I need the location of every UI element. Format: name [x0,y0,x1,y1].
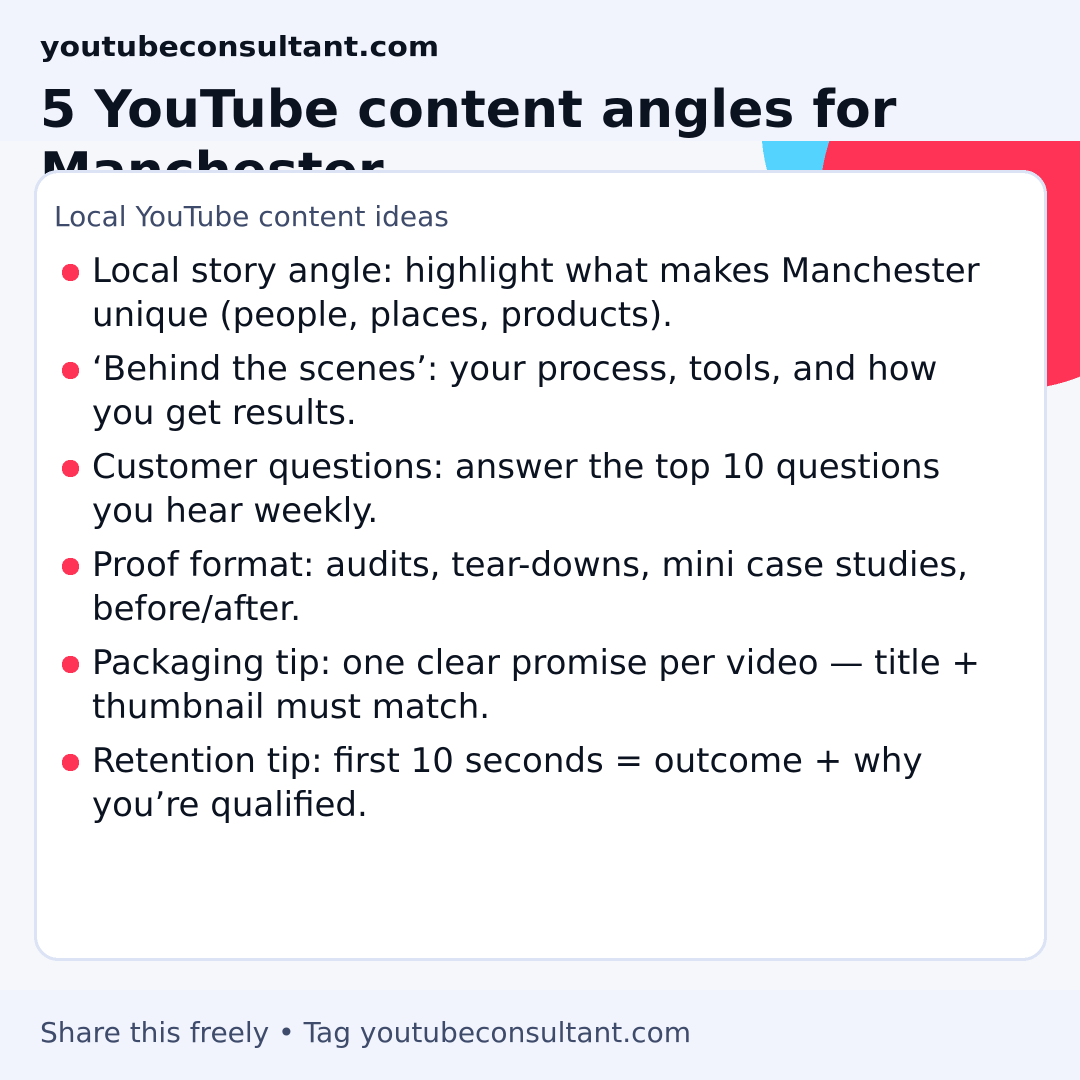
bullet 3 [62,447,940,531]
title: Manchester [40,142,384,202]
title [40,80,896,202]
bullet 4: before/after. [92,589,301,629]
header band [0,0,1080,141]
bullet 6: Retention tip: first 10 seconds = outcome + why [92,741,923,781]
card heading: Local YouTube content ideas [54,200,449,233]
bullet 5: thumbnail must match. [92,687,490,727]
bullet 2: you get results. [92,393,357,433]
footer band [0,990,1080,1080]
bullet 1 [62,251,980,335]
panel: content ideas card [34,170,1047,961]
bullet 2: ‘Behind the scenes’: your process, tools, and how [92,349,937,389]
title: 5 YouTube content angles for [40,80,896,140]
bullet 6: you’re qualified. [92,785,368,825]
brand name: youtubeconsultant.com [40,30,439,63]
bullet 3: Customer questions: answer the top 10 questions [92,447,940,487]
bullet 5 [62,643,980,727]
bullet 4 [62,545,968,629]
footer text: Share this freely • Tag youtubeconsultant.com [40,1016,691,1049]
bullet 1: unique (people, places, products). [92,295,673,335]
bullet 1: Local story angle: highlight what makes Manchester [92,251,980,291]
bullet 6 [62,741,923,825]
bullet 2 [62,349,937,433]
bullet 4: Proof format: audits, tear-downs, mini case studies, [92,545,968,585]
bullet 3: you hear weekly. [92,491,378,531]
bullet 5: Packaging tip: one clear promise per video — title + [92,643,980,683]
